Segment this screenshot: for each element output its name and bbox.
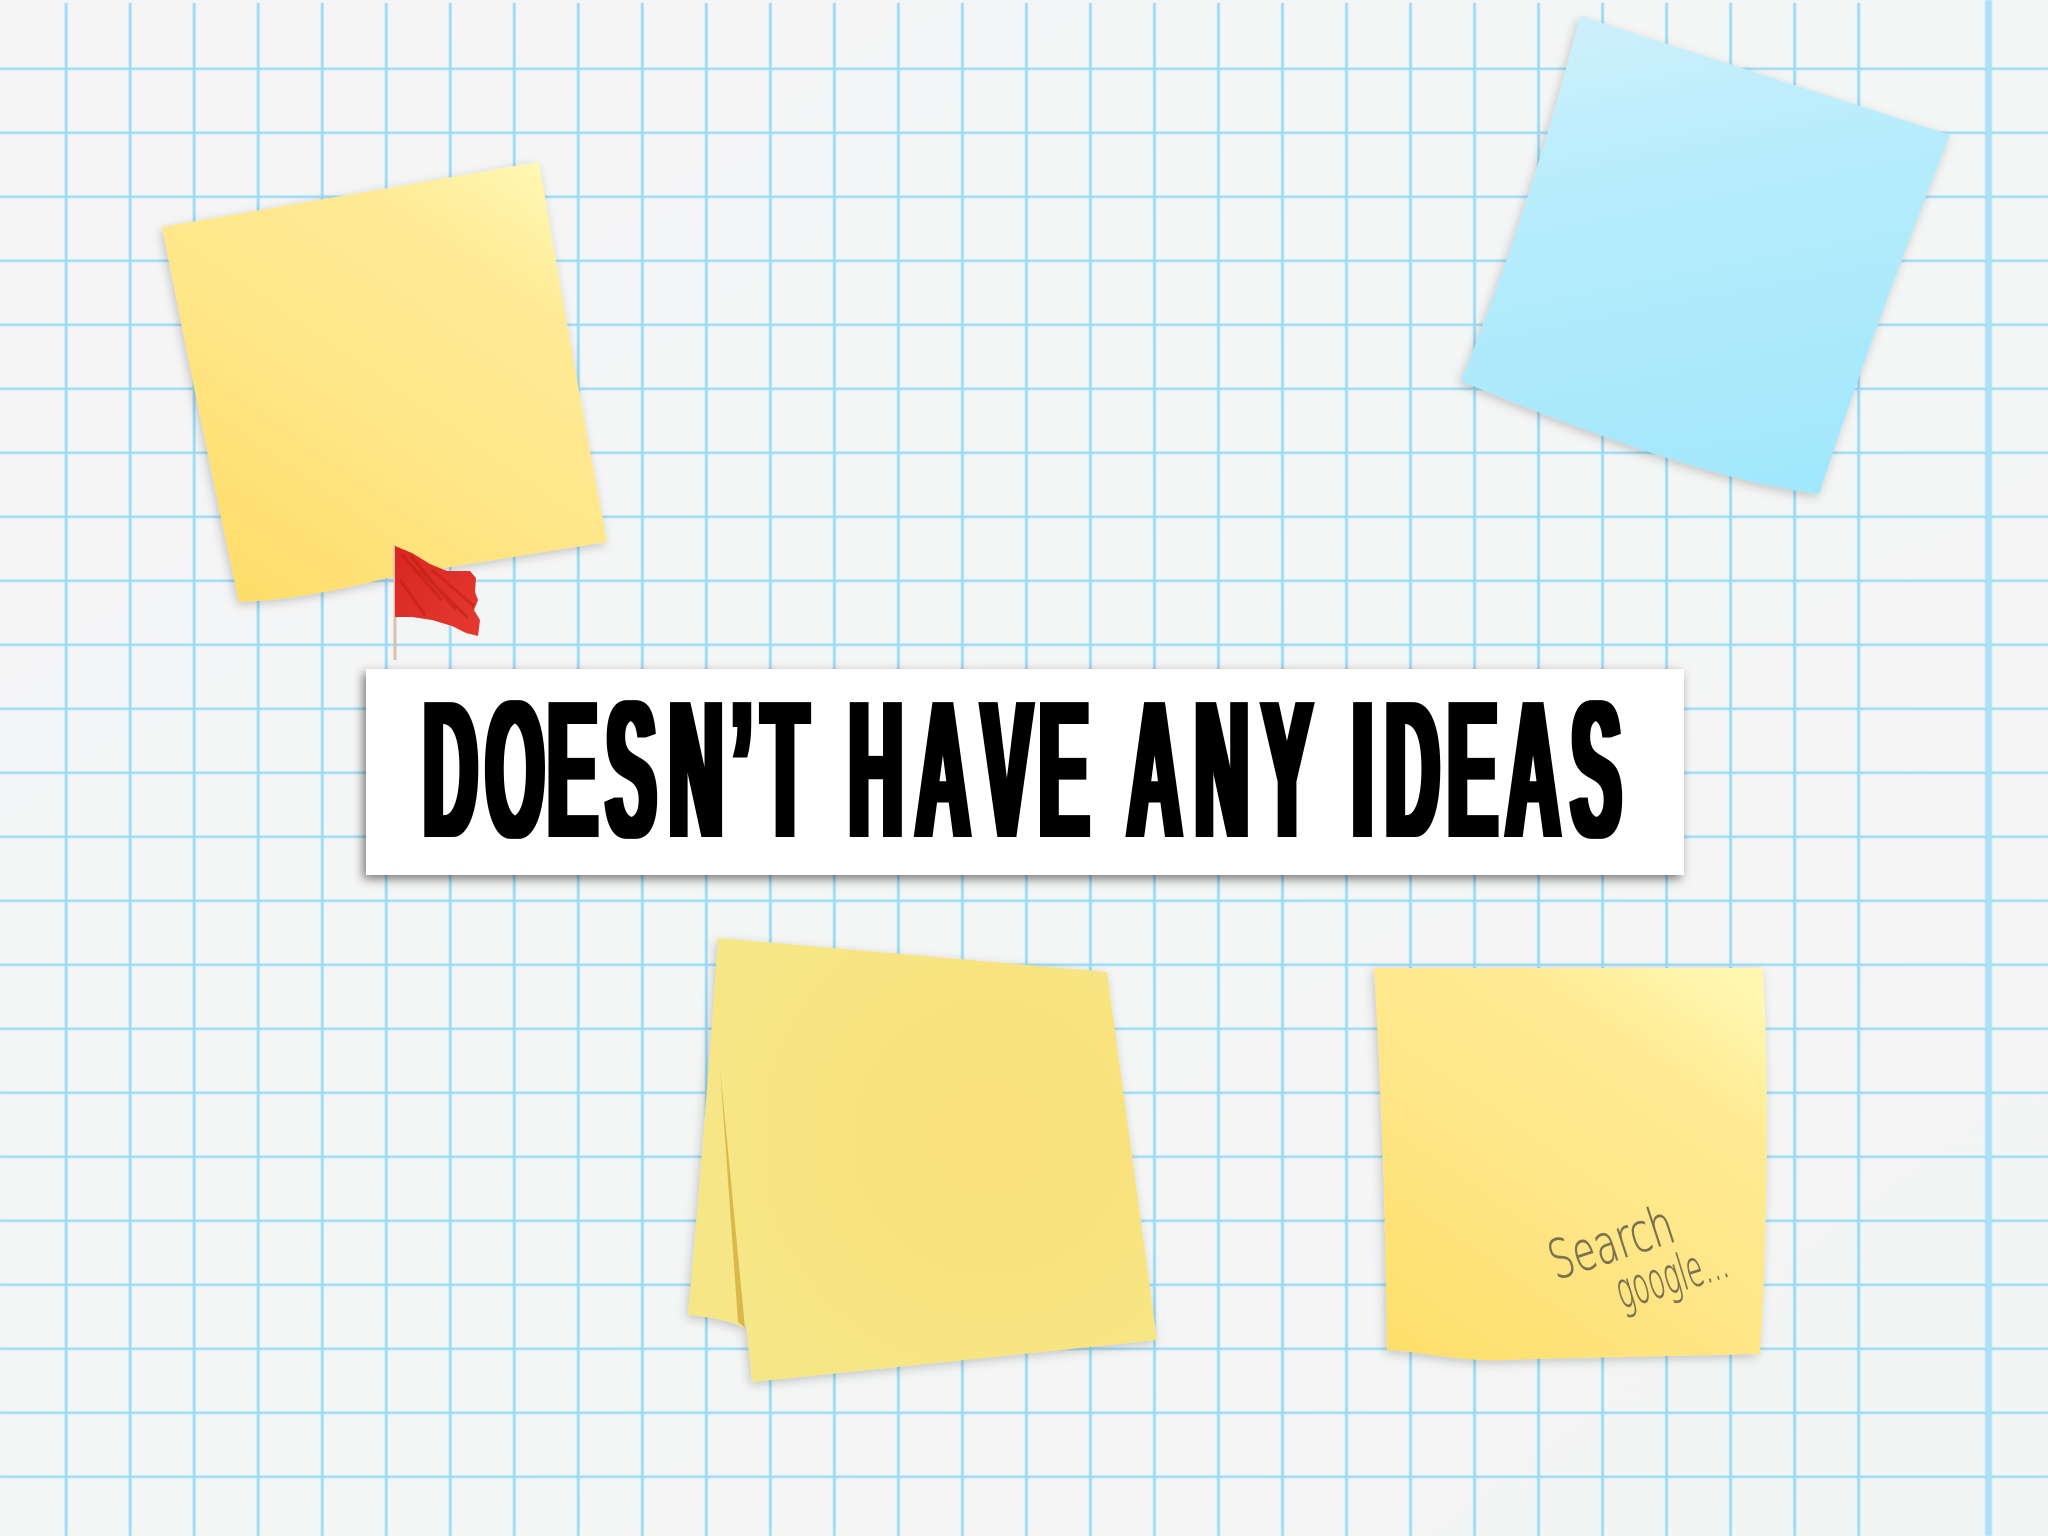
fold shadow — [720, 1067, 745, 1328]
title banner — [366, 661, 1684, 879]
title text: DOESN’T HAVE ANY IDEAS — [423, 661, 1621, 879]
front sheet of folded note — [718, 938, 1157, 1382]
sticky note: yellow top left — [162, 162, 607, 602]
sticky note: yellow bottom right with handwriting — [1374, 968, 1767, 1360]
handwritten note: Search — [1541, 1193, 1682, 1292]
sticky note: blue top right — [1461, 16, 1950, 494]
sticky note: folded yellow bottom centre — [688, 938, 1157, 1382]
icon: red flag — [394, 545, 480, 660]
handwritten note — [1541, 1193, 1735, 1320]
handwritten note: google... — [1609, 1232, 1735, 1320]
back sheet of folded note — [688, 938, 760, 1328]
